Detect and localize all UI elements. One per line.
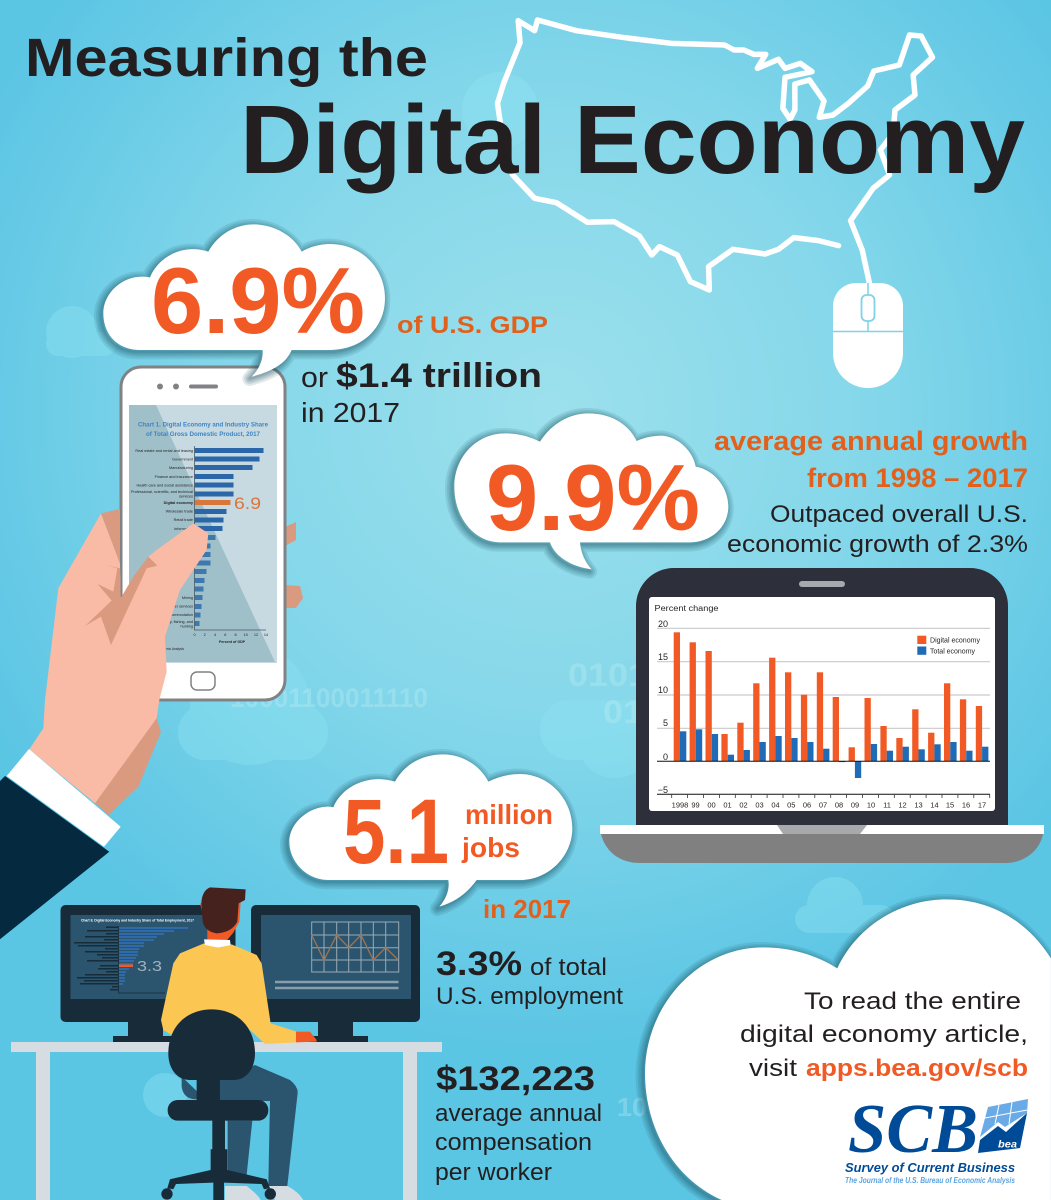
- line and bar chart: percent change: 02: [739, 800, 748, 810]
- line and bar chart: percent change: 08: [835, 800, 843, 810]
- call to action text: [740, 988, 1028, 1082]
- line and bar chart: percent change: 12: [898, 800, 907, 810]
- logo: Survey of Current Business: bea: [998, 1140, 1017, 1150]
- call to action text: To read the entire: [804, 988, 1021, 1015]
- line and bar chart: percent change: 11: [883, 800, 891, 810]
- bar chart on phone: 0: [193, 633, 196, 637]
- text: GDP share: [301, 312, 548, 428]
- bar chart on phone: Finance and insurance: [155, 475, 193, 479]
- hair: [201, 887, 246, 933]
- bar chart on phone: Other services: [169, 604, 193, 608]
- suit sleeve: [0, 776, 109, 939]
- line and bar chart: percent change: 5: [663, 718, 668, 728]
- line and bar chart: percent change: 20: [658, 619, 668, 629]
- text: GDP share: of U.S. GDP: [397, 312, 548, 339]
- bar chart on phone: Professional, scientific, and technical: [131, 490, 193, 494]
- phone with GDP share chart: [121, 367, 285, 700]
- bar chart on phone: 4: [214, 633, 216, 637]
- call to action text: visit: [749, 1055, 797, 1082]
- line and bar chart: percent change: 15: [946, 800, 954, 810]
- bar chart on phone: Information: [174, 527, 193, 531]
- chart title on phone: [138, 422, 268, 438]
- bar chart on phone: 8: [234, 633, 237, 637]
- line and bar chart: percent change: 0: [663, 752, 668, 762]
- text: jobs statistics: of total: [530, 954, 607, 981]
- digital economy bars: [674, 632, 982, 761]
- background: 10001100011110: [230, 683, 428, 713]
- callout: 9.9 percent: [452, 413, 728, 571]
- shirt cuff: [7, 749, 121, 847]
- bar chart on phone: Percent of GDP: [219, 640, 245, 644]
- bar chart on phone: Manufacturing: [169, 466, 193, 470]
- text: jobs statistics: $132,223: [436, 1060, 595, 1098]
- background: 01: [603, 694, 643, 730]
- logo: Survey of Current Business: SCB: [848, 1091, 978, 1168]
- text: jobs statistics: U.S. employment: [436, 983, 623, 1010]
- callout: 9.9 percent: 9.9%: [486, 445, 700, 550]
- text: jobs statistics: compensation: [435, 1129, 592, 1156]
- line and bar chart: percent change: 15: [658, 652, 668, 662]
- bar chart on phone: Retail trade: [174, 518, 193, 522]
- line and bar chart: percent change: 04: [771, 800, 780, 810]
- chart title on phone: Chart 1. Digital Economy and Industry Share: [138, 422, 268, 428]
- text: GDP share: or: [301, 362, 328, 394]
- line and bar chart: percent change: 05: [787, 800, 795, 810]
- call to action text: apps.bea.gov/scb: [806, 1055, 1028, 1082]
- line and bar chart: percent change: 01: [723, 800, 732, 810]
- trousers: [182, 1065, 298, 1186]
- text: average annual growth: average annual growth: [714, 426, 1028, 456]
- text: average annual growth: from 1998 – 2017: [807, 463, 1028, 493]
- chart legend: Digital economy: [930, 638, 980, 644]
- bar chart on phone: [131, 446, 268, 651]
- text: jobs statistics: [435, 894, 623, 1186]
- bar chart on phone: hunting: [181, 624, 193, 628]
- callout: 5.1 million jobs: 5.1: [343, 781, 449, 883]
- office chair: [161, 1009, 276, 1200]
- text: jobs statistics: per worker: [435, 1159, 552, 1186]
- desk with monitors: [11, 905, 442, 1200]
- sweater: [161, 943, 297, 1080]
- line and bar chart: percent change: −5: [658, 785, 668, 795]
- left monitor with employment chart: 3.3: [137, 958, 162, 975]
- callout: 5.1 million jobs: jobs: [461, 832, 520, 863]
- line and bar chart: percent change: 16: [962, 800, 970, 810]
- panel: read the article cloud: [643, 899, 1051, 1200]
- neck and collar: [200, 903, 241, 941]
- shoes: [225, 1186, 303, 1200]
- text: average annual growth: [714, 426, 1028, 558]
- text: average annual growth: economic growth of 2.3%: [727, 531, 1028, 558]
- background: 10: [617, 1092, 647, 1122]
- line and bar chart: percent change: 13: [914, 800, 923, 810]
- bar chart on phone: Government: [172, 458, 194, 462]
- bar chart on phone: 12: [254, 633, 258, 637]
- logo: Survey of Current Business: [845, 1091, 1028, 1185]
- text: jobs statistics: in 2017: [483, 894, 571, 924]
- title: [25, 28, 1025, 194]
- left monitor with employment chart: Chart 8. Digital Economy and Industry Share of Total Employment, 2017: [81, 918, 194, 922]
- line and bar chart: percent change: 07: [819, 800, 827, 810]
- callout: 5.1 million jobs: million: [465, 799, 553, 830]
- title: Digital Economy: [240, 85, 1025, 194]
- title: Measuring the: [25, 28, 428, 88]
- line and bar chart: percent change: 1998: [672, 800, 688, 810]
- bar chart on phone: Wholesale trade: [166, 510, 193, 514]
- bar chart on phone: Real estate and rental and leasing: [135, 449, 193, 453]
- line and bar chart: percent change: [654, 604, 990, 810]
- line and bar chart: percent change: 03: [755, 800, 764, 810]
- chart legend: Total economy: [930, 648, 975, 656]
- line and bar chart: percent change: 06: [803, 800, 811, 810]
- bar chart on phone: Digital economy: [164, 501, 194, 505]
- text: GDP share: in 2017: [301, 397, 400, 428]
- bar chart on phone: 6: [224, 633, 226, 637]
- total economy bars: [680, 729, 988, 778]
- fingers behind phone: [285, 522, 303, 608]
- text: jobs statistics: average annual: [435, 1100, 602, 1127]
- bar chart on phone: Health care and social assistance: [136, 484, 193, 488]
- text: GDP share: $1.4 trillion: [336, 357, 542, 395]
- bar chart on phone: 14: [264, 633, 268, 637]
- U.S. map outline with mouse cable: [497, 20, 932, 290]
- bar chart on phone: Accommodation: [166, 613, 193, 617]
- background: 0101: [568, 657, 648, 693]
- left monitor with employment chart: [60, 905, 236, 1022]
- line and bar chart: percent change: 00: [707, 800, 716, 810]
- text: jobs statistics: 3.3%: [436, 945, 522, 983]
- bar chart on phone: Mining: [182, 596, 193, 600]
- bar chart on phone: mic Analysis: [166, 647, 184, 651]
- text: average annual growth: Outpaced overall U.S.: [770, 501, 1028, 528]
- right monitor with line graph: [251, 905, 420, 1022]
- callout: 6.9 percent: 6.9%: [151, 248, 365, 353]
- person seated at desk: [161, 887, 317, 1200]
- chart legend: [917, 636, 980, 656]
- line and bar chart: percent change: 09: [851, 800, 859, 810]
- line and bar chart: percent change: 10: [867, 800, 875, 810]
- icon: computer mouse: [833, 283, 903, 388]
- line and bar chart: percent change: 10: [658, 685, 668, 695]
- bar chart on phone: services: [179, 494, 193, 498]
- line and bar chart: percent change: 17: [978, 800, 986, 810]
- callout: 6.9 percent: [101, 224, 385, 379]
- laptop: [600, 568, 1044, 863]
- bar chart on phone: Agriculture, forestry, fishing, and: [139, 620, 193, 624]
- chart title on phone: of Total Gross Domestic Product, 2017: [146, 431, 260, 438]
- line and bar chart: percent change: 14: [930, 800, 939, 810]
- hand holding phone: [0, 509, 208, 939]
- call to action text: digital economy article,: [740, 1021, 1028, 1048]
- bar chart on phone: 2: [204, 633, 206, 637]
- line and bar chart: percent change: 99: [691, 800, 700, 810]
- callout: 5.1 million jobs: [287, 754, 572, 909]
- logo: Survey of Current Business: Survey of Current Business: [845, 1160, 1015, 1175]
- bar chart on phone: 10: [244, 633, 248, 637]
- bar chart on phone: 6.9: [234, 495, 261, 513]
- line and bar chart: percent change: Percent change: [654, 604, 719, 613]
